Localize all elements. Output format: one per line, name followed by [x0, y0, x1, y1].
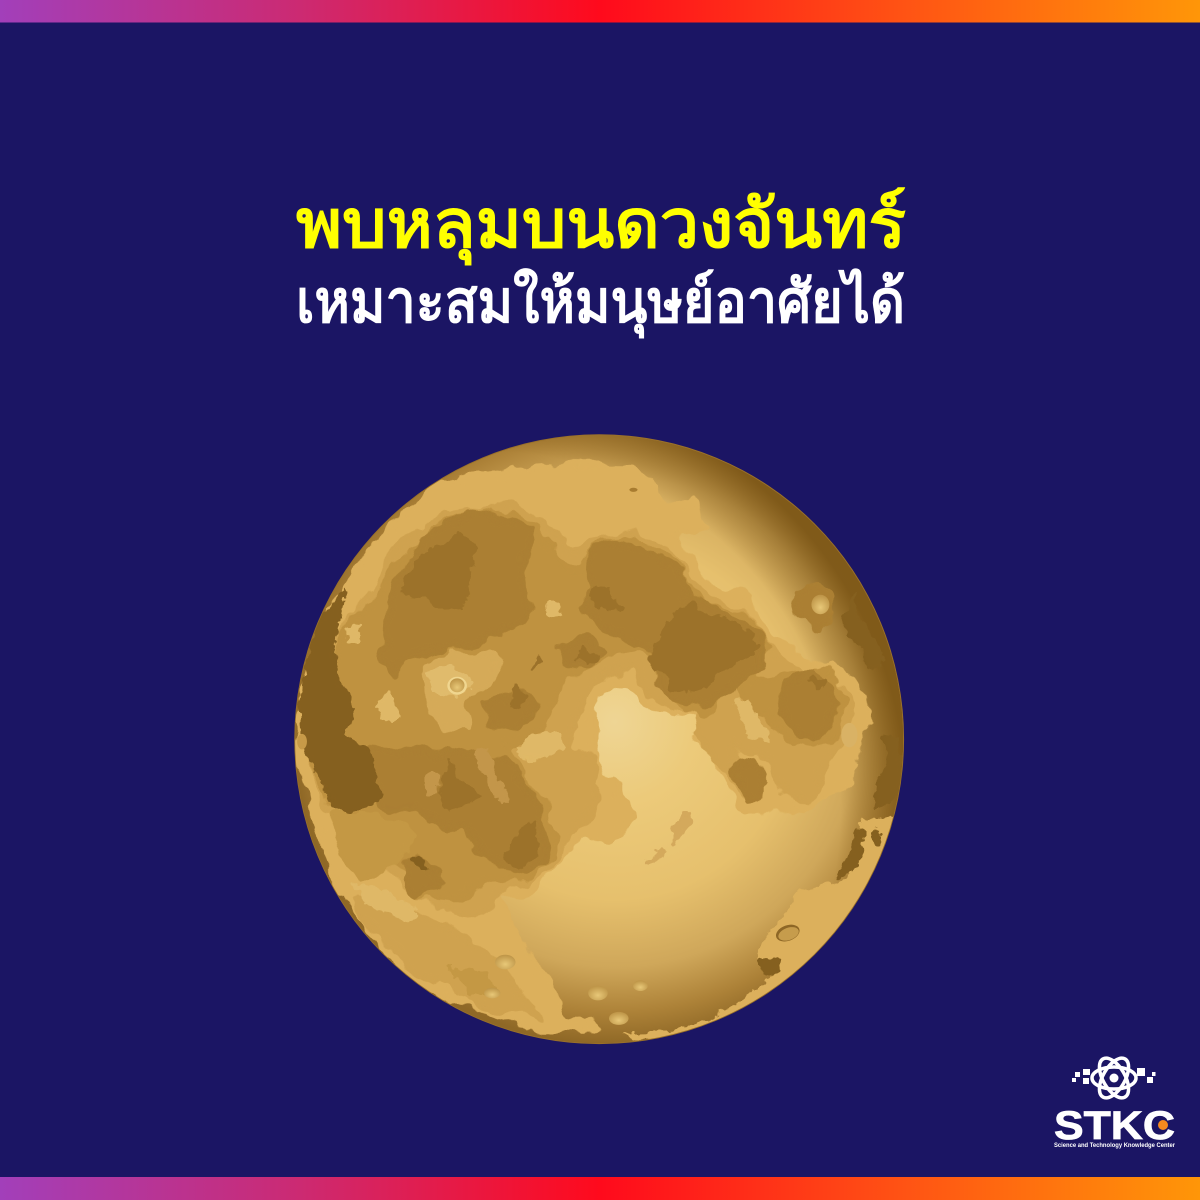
pale streaks inside seas: [424, 748, 510, 804]
icon: atom: [1092, 1053, 1136, 1103]
dark eastern seas: [758, 587, 902, 979]
south-west mottled highland: [347, 889, 545, 1020]
top gradient bar: [0, 0, 1200, 22]
dark maria: [400, 532, 827, 873]
icon: pixel squares: [1072, 1068, 1156, 1084]
mid-tone seas: [358, 506, 841, 898]
lighter central-west patch: [415, 651, 500, 730]
logo wordmark: STKC: [1054, 1104, 1175, 1148]
heading line 2: เหมาะสมให้มนุษย์อาศัยได้: [296, 267, 905, 339]
light patches: [347, 604, 774, 924]
craters: [297, 488, 858, 1025]
moon illustration: [294, 434, 917, 1057]
south highland patches: [443, 967, 500, 996]
logo: STKC: [1054, 1053, 1176, 1149]
moon base surface: [295, 435, 903, 1043]
bottom gradient bar: [0, 1177, 1200, 1200]
logo tagline: Science and Technology Knowledge Center: [1054, 1143, 1176, 1149]
thin dark south-west limb: [295, 739, 599, 1043]
title: [296, 187, 906, 339]
rim shading: [538, 435, 903, 879]
south-west ridge: [329, 809, 396, 882]
heading line 1: พบหลุมบนดวงจันทร์: [296, 187, 906, 266]
small sea streaks on bright plain: [643, 810, 693, 867]
logo dot: [1158, 1120, 1168, 1130]
highlands: [294, 463, 872, 1032]
eastern rim terrain: [622, 816, 893, 1040]
western dark sea: [299, 581, 382, 814]
